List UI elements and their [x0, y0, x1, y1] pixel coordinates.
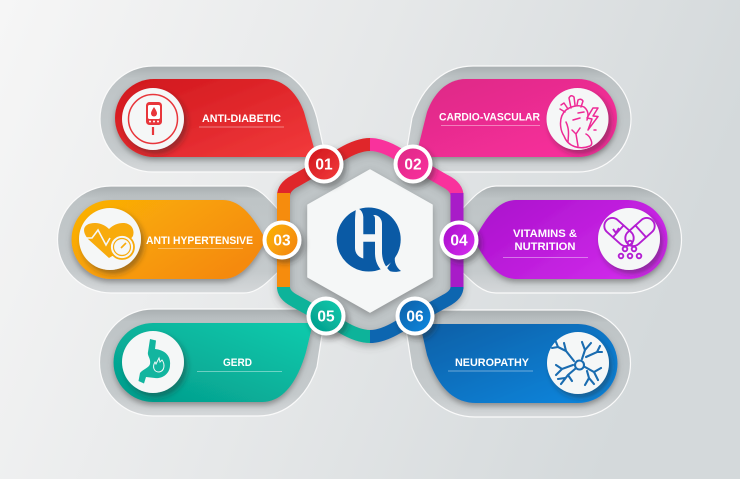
badge 02 — [394, 144, 432, 184]
pink tab — [418, 79, 617, 157]
purple tab — [474, 200, 668, 279]
panel: neuropathy — [403, 310, 630, 417]
well — [456, 186, 682, 293]
icon circle — [79, 208, 141, 270]
badge 06 — [396, 296, 434, 336]
well — [403, 66, 631, 172]
icon: heart — [560, 96, 598, 148]
panel: anti-diabetic — [100, 66, 329, 172]
badge 05 — [306, 296, 346, 336]
label: VITAMINS & — [513, 228, 577, 240]
icon: glucose meter — [128, 94, 178, 144]
label: ANTI HYPERTENSIVE — [146, 235, 253, 247]
logo tail — [386, 256, 401, 272]
panel: gerd — [99, 309, 326, 416]
ring segment: pink — [370, 144, 457, 196]
label: ANTI-DIABETIC — [202, 113, 281, 125]
icon: neuron — [552, 342, 602, 385]
badge 02: 02 — [404, 156, 422, 174]
well — [100, 66, 329, 172]
red tab — [115, 79, 314, 157]
icon: heart and gauge — [84, 223, 134, 259]
icon: stomach — [138, 339, 170, 384]
ring segment: purple — [450, 193, 464, 289]
logo — [337, 208, 401, 272]
badge 06: 06 — [406, 308, 424, 326]
badge 01: 01 — [315, 156, 333, 174]
ring segment: teal — [284, 287, 370, 336]
blue tab — [420, 324, 618, 403]
panel: anti hypertensive — [58, 186, 284, 293]
panel: vitamins and nutrition: NUTRITION — [514, 241, 576, 253]
badge 04: 04 — [450, 232, 468, 250]
ring segment: blue — [370, 287, 457, 336]
icon circle — [546, 88, 608, 150]
well — [99, 309, 326, 416]
label: NEUROPATHY — [455, 357, 530, 369]
icon circle — [122, 88, 184, 150]
ring — [284, 144, 457, 336]
icon circle — [598, 208, 660, 270]
logo bubble — [337, 208, 401, 272]
well — [403, 310, 630, 417]
panel: central well — [284, 144, 457, 336]
label: GERD — [223, 357, 252, 369]
ring segment: red — [284, 144, 370, 196]
badge 05: 05 — [317, 308, 335, 326]
badge 03 — [262, 220, 302, 260]
icon circle — [122, 331, 184, 393]
centre hexagon — [308, 170, 432, 312]
logo letter H — [355, 208, 391, 272]
badge 04 — [440, 220, 478, 260]
orange tab — [72, 200, 266, 279]
badge 01 — [304, 144, 344, 184]
icon circle — [547, 332, 609, 394]
panel: cardio-vascular — [403, 66, 631, 172]
ring segment: orange — [277, 193, 290, 289]
icon: capsules — [601, 215, 658, 258]
panel: vitamins and nutrition — [456, 186, 682, 293]
label: CARDIO-VASCULAR — [439, 112, 540, 124]
badge 03: 03 — [273, 232, 291, 250]
well — [58, 186, 284, 293]
teal tab — [114, 323, 313, 402]
